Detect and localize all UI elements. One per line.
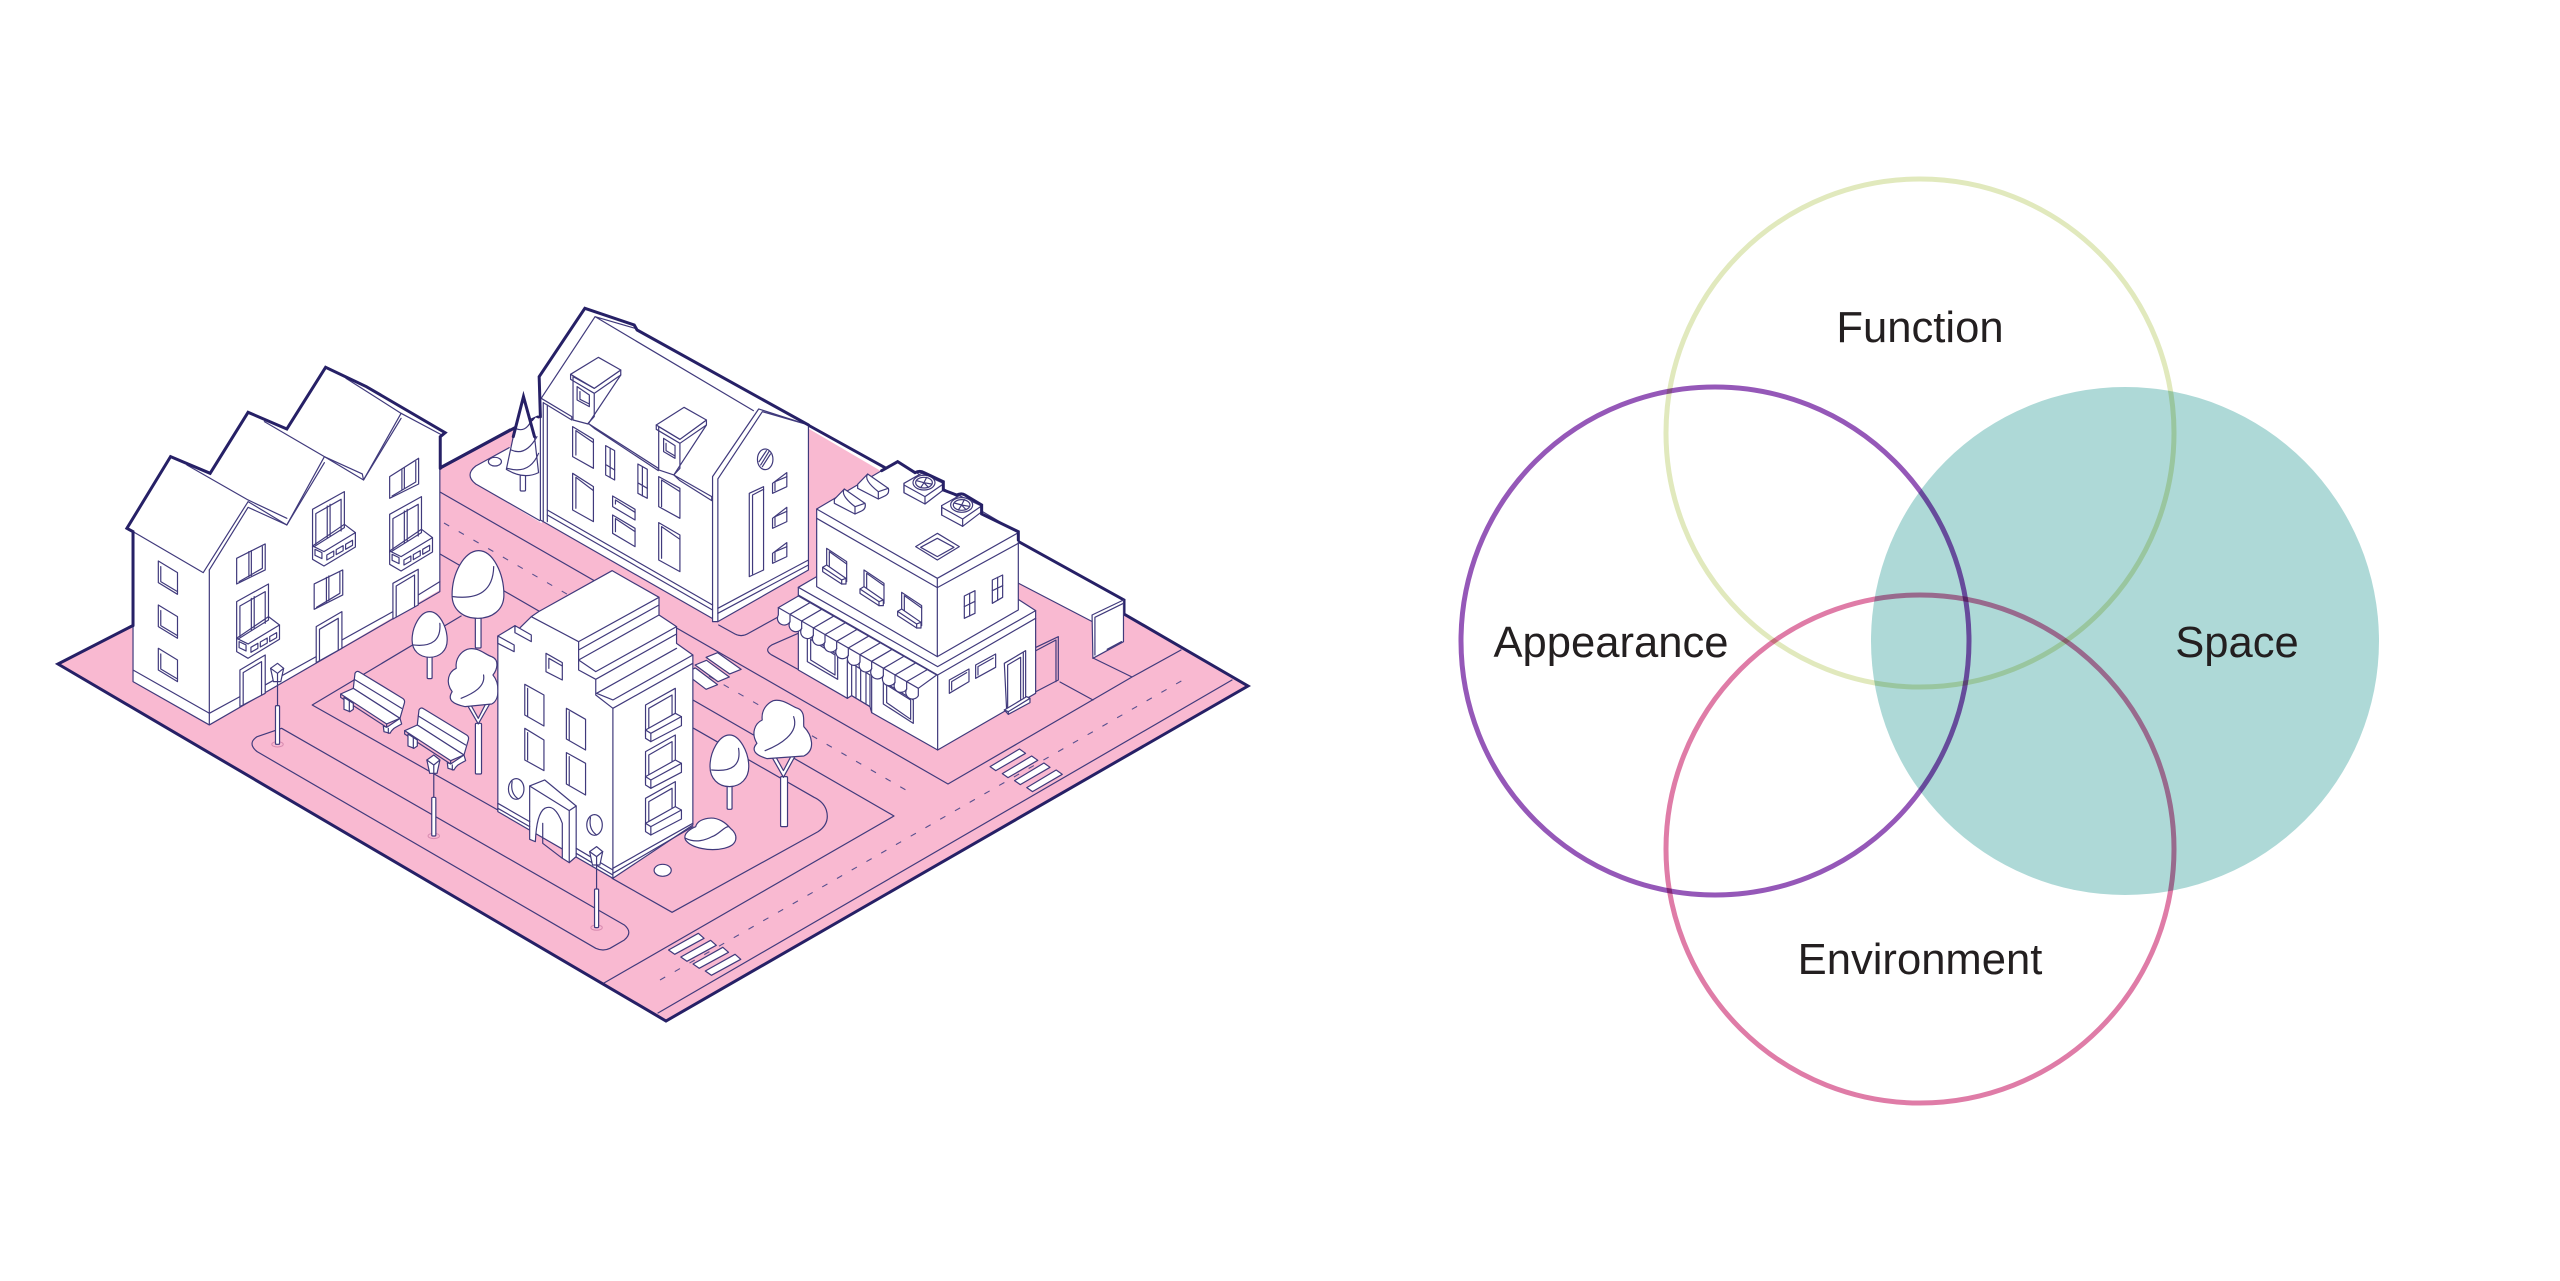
thick silhouette <box>127 367 445 626</box>
plaza and curb outlines <box>252 616 827 950</box>
thick edge behind spruce <box>440 425 520 468</box>
fluffy tree right of building <box>754 700 812 827</box>
fluffy tree behind building <box>448 649 498 774</box>
row houses <box>127 367 445 725</box>
label: environment: Environment <box>1798 936 2042 984</box>
gable wall details <box>757 449 773 470</box>
shop awning <box>777 596 937 699</box>
side windows and door <box>949 651 1026 710</box>
dormer one <box>573 370 621 424</box>
dormer two <box>659 420 706 475</box>
crosswalks <box>669 653 1062 975</box>
circle: function <box>1666 179 2174 687</box>
round windows <box>508 779 524 799</box>
shop windows and door <box>807 635 838 679</box>
thick ground outline <box>58 417 1248 1021</box>
base <box>547 510 713 610</box>
windows <box>525 653 586 795</box>
spruce tree <box>506 397 539 491</box>
arch door <box>530 780 576 863</box>
thick shop roofline <box>882 462 1018 540</box>
rear sign board <box>1092 600 1123 658</box>
egg trees by the square <box>412 551 504 679</box>
circle: appearance <box>1461 387 1969 895</box>
white garden patch <box>470 417 542 523</box>
mid building <box>498 571 693 878</box>
bush and stone <box>654 818 736 876</box>
plinth lines <box>498 803 693 875</box>
balconies <box>237 584 279 658</box>
big house <box>539 308 808 622</box>
side fence <box>1036 637 1058 692</box>
air conditioners <box>904 473 943 504</box>
label: appearance: Appearance <box>1493 619 1729 667</box>
benches <box>341 671 469 770</box>
thick roofline <box>539 308 808 425</box>
venn diagram <box>1461 179 2379 1103</box>
white rear wall <box>1018 540 1124 622</box>
circle: environment <box>1666 595 2174 1103</box>
ground plane <box>58 330 1248 1021</box>
shop ground floor <box>798 577 1058 750</box>
roof vents <box>834 489 865 514</box>
front windows <box>573 427 680 572</box>
block lines near big house <box>719 616 800 671</box>
side windows <box>158 561 177 682</box>
rear wall base line <box>1018 583 1093 622</box>
circle: space <box>1871 387 2379 895</box>
label: function: Function <box>1836 304 2004 352</box>
egg tree right of building <box>710 735 749 809</box>
skylight <box>916 533 959 560</box>
doors <box>240 569 418 707</box>
label: space: Space <box>2175 619 2299 667</box>
street lamps <box>271 663 603 930</box>
street lines <box>440 492 1232 1013</box>
shop upper floor <box>817 462 1018 657</box>
upper windows <box>823 548 847 584</box>
front windows <box>237 458 419 609</box>
gable <box>713 409 808 622</box>
